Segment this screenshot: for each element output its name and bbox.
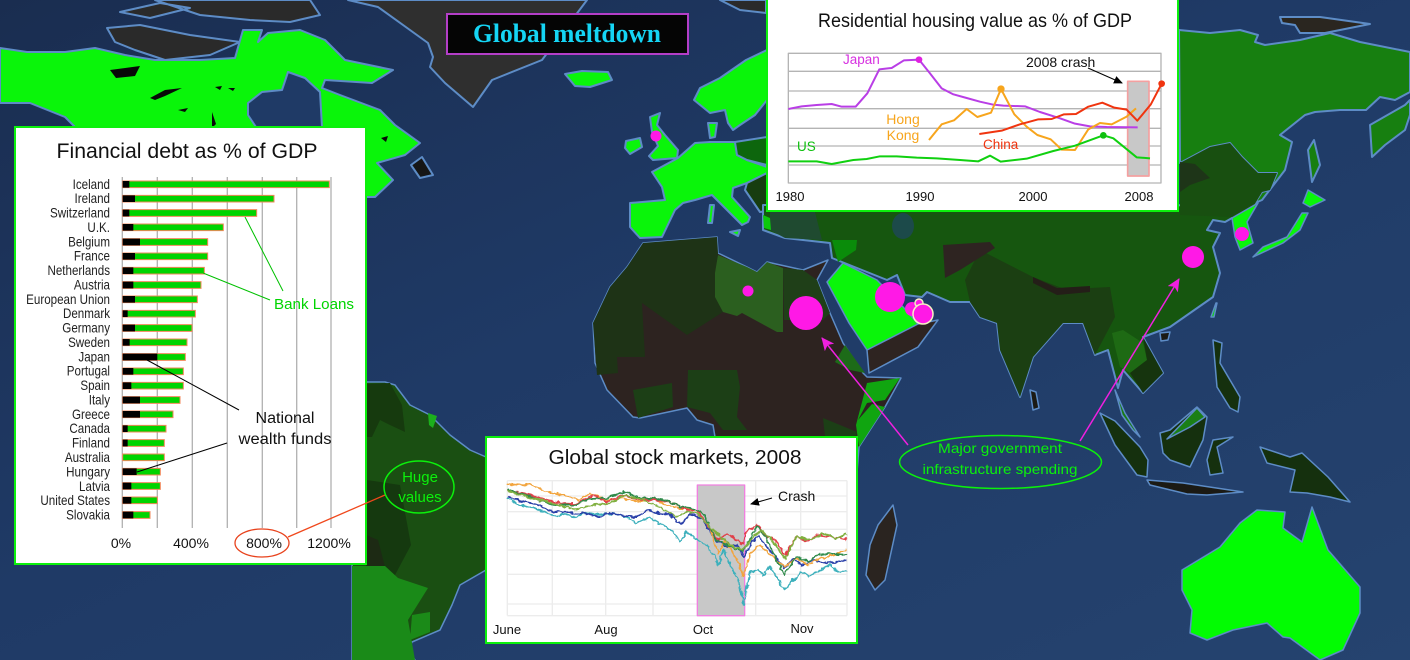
line: blue index bbox=[507, 497, 847, 568]
land: Newfoundland bbox=[411, 157, 433, 178]
grid lines bbox=[122, 177, 331, 528]
land: Canada and Alaska bbox=[0, 30, 420, 197]
bubble: China bbox=[1182, 246, 1204, 268]
callout: major government infrastructure spending: Major government bbox=[938, 440, 1062, 456]
country labels bbox=[26, 177, 111, 523]
lakes bbox=[110, 66, 388, 142]
land: Sumatra bbox=[1100, 413, 1148, 477]
region: Colombia and Venezuela bbox=[367, 383, 405, 437]
x axis labels bbox=[776, 189, 1153, 204]
index lines bbox=[507, 484, 847, 605]
country labels: Austria bbox=[74, 278, 110, 293]
land: Malay peninsula bbox=[1115, 390, 1140, 437]
line: Japan bbox=[788, 60, 1138, 127]
line: olive index bbox=[507, 491, 847, 558]
country labels: Japan bbox=[78, 350, 110, 365]
heading: financial debt: Financial debt as % of GDP bbox=[56, 140, 318, 163]
land: Denmark and Mediterranean islands bbox=[708, 123, 740, 236]
heading: global stock markets: Global stock markets, 2008 bbox=[548, 447, 802, 469]
land: Australia bbox=[1182, 507, 1360, 660]
land: Saudi Arabia bbox=[827, 263, 918, 350]
land: Sulawesi bbox=[1207, 437, 1233, 475]
country labels: Italy bbox=[89, 393, 111, 408]
region: Himalaya bbox=[1033, 277, 1090, 295]
region: Guyana bbox=[428, 413, 437, 428]
country labels: France bbox=[74, 249, 110, 264]
country labels: Hungary bbox=[66, 465, 111, 480]
bubble: UK bbox=[650, 130, 662, 142]
arrow: to China bbox=[1080, 279, 1179, 441]
land: Java bbox=[1147, 480, 1243, 495]
peak markers bbox=[916, 56, 1165, 139]
heading: residential housing: Residential housing value as % of GDP bbox=[818, 10, 1132, 32]
region: Somalia bbox=[856, 378, 900, 447]
country labels: Canada bbox=[69, 421, 110, 436]
line: red index bbox=[507, 490, 847, 555]
bars bbox=[123, 181, 329, 518]
country labels: Slovakia bbox=[66, 508, 110, 523]
green bank loan bars bbox=[123, 181, 329, 518]
callout: huge values: values bbox=[398, 489, 442, 506]
x axis labels: Aug bbox=[594, 622, 618, 637]
callout: major government infrastructure spending bbox=[822, 279, 1179, 488]
land: western Europe bbox=[630, 142, 767, 238]
land: Ireland bbox=[625, 138, 642, 154]
title box bbox=[447, 14, 688, 54]
land: Sarawak bbox=[1167, 408, 1205, 439]
region: Afghanistan bbox=[943, 242, 995, 278]
land: South America bbox=[352, 382, 486, 660]
land: Arctic islands bbox=[107, 0, 766, 60]
region: Ivory Coast bbox=[633, 383, 673, 418]
bubble: Qatar bbox=[905, 302, 919, 316]
country labels: Belgium bbox=[68, 235, 110, 250]
x axis labels: 400% bbox=[173, 535, 209, 551]
bubble: Bahrain bbox=[915, 299, 923, 307]
annotation: 2008 crash bbox=[1026, 54, 1122, 83]
land: Hainan and Sri Lanka bbox=[1030, 332, 1170, 410]
bubble: Saudi Arabia bbox=[875, 282, 905, 312]
x axis labels: Nov bbox=[790, 621, 814, 636]
country labels: Iceland bbox=[73, 177, 110, 192]
line: Hong Kong bbox=[929, 89, 1136, 150]
line label: Japan: Japan bbox=[843, 52, 880, 67]
land: Taiwan bbox=[1211, 303, 1217, 317]
country labels: Finland bbox=[72, 436, 110, 451]
region: Peru bbox=[366, 480, 411, 575]
country labels: Sweden bbox=[68, 335, 110, 350]
country labels: Latvia bbox=[79, 479, 110, 494]
callout: huge values bbox=[235, 461, 454, 557]
annotation: 2008 crash: 2008 crash bbox=[1026, 54, 1095, 70]
region: Nigeria and Chad bbox=[687, 370, 747, 430]
Hudson Bay bbox=[248, 72, 322, 127]
line label: Hong Kong: Hong bbox=[886, 111, 920, 127]
panel: residential housing chart bbox=[767, 0, 1178, 211]
region: Greece bbox=[763, 215, 771, 230]
region: India bbox=[965, 250, 1115, 397]
country labels: Spain bbox=[80, 378, 110, 393]
line: teal index bbox=[507, 498, 847, 605]
land: Greenland bbox=[348, 0, 587, 107]
x axis labels bbox=[111, 535, 351, 551]
land: Japan bbox=[1253, 190, 1325, 257]
x axis labels: 1980 bbox=[776, 189, 804, 204]
country labels: Ireland bbox=[75, 191, 110, 206]
region: Uruguay bbox=[410, 612, 430, 640]
callout: bank loans bbox=[203, 217, 354, 313]
land: Africa bbox=[593, 237, 901, 560]
land: eastern Europe bbox=[735, 137, 767, 165]
country labels: Germany bbox=[62, 321, 111, 336]
chart frame and grid bbox=[788, 53, 1161, 183]
callout: national wealth funds: wealth funds bbox=[237, 431, 332, 448]
land: Arctic Siberia islands bbox=[1280, 17, 1370, 33]
country labels: Australia bbox=[65, 450, 110, 465]
region: Manchuria bbox=[1180, 143, 1277, 217]
region: Iraq bbox=[832, 240, 857, 262]
x axis labels: Oct bbox=[693, 622, 713, 637]
callout: national wealth funds bbox=[137, 360, 332, 472]
land: Asia bbox=[763, 205, 1240, 397]
line: China bbox=[979, 84, 1162, 134]
bubble: Egypt bbox=[789, 296, 823, 330]
bubble: UAE bbox=[913, 304, 933, 324]
crash band bbox=[1128, 81, 1149, 176]
annotation: crash bbox=[751, 488, 815, 504]
spending bubbles bbox=[650, 130, 1249, 330]
country labels: Portugal bbox=[67, 364, 110, 379]
callout: national wealth funds: National bbox=[256, 410, 314, 427]
line label: China: China bbox=[983, 137, 1019, 152]
x axis labels: June bbox=[493, 622, 521, 637]
land: New Guinea bbox=[1260, 447, 1350, 502]
callout: bank loans: Bank Loans bbox=[274, 296, 354, 313]
line label: US: US bbox=[797, 139, 816, 154]
country labels: U.K. bbox=[87, 220, 110, 235]
land: Korea bbox=[1232, 203, 1258, 250]
region: Turkey bbox=[770, 212, 822, 240]
country labels: Greece bbox=[72, 407, 110, 422]
bubble: Libya bbox=[742, 286, 754, 296]
x axis labels bbox=[493, 621, 814, 637]
land: Sakhalin bbox=[1308, 140, 1320, 182]
x axis labels: 1990 bbox=[906, 189, 934, 204]
land: Russian Far East bbox=[1179, 30, 1410, 203]
region: Argentina and Chile bbox=[352, 566, 428, 660]
land: Kamchatka bbox=[1370, 100, 1410, 157]
x axis labels: 2000 bbox=[1019, 189, 1047, 204]
region: Bolivia bbox=[366, 535, 385, 567]
callout: huge values: Huge bbox=[402, 469, 438, 486]
region: Libya bbox=[715, 255, 783, 332]
region: Caspian Sea bbox=[892, 213, 914, 239]
line: dark green index bbox=[507, 489, 847, 575]
crash band bbox=[697, 485, 745, 616]
panel: financial debt bar chart bbox=[15, 127, 366, 564]
country labels: Switzerland bbox=[50, 206, 110, 221]
line: orange index bbox=[507, 484, 847, 577]
land: Iceland bbox=[565, 71, 612, 87]
callout: major government infrastructure spending: infrastructure spending bbox=[922, 461, 1078, 477]
land: Scandinavia bbox=[694, 50, 767, 130]
land: Yemen and Oman bbox=[867, 320, 938, 373]
land: Britain bbox=[649, 113, 678, 160]
x axis labels: 1200% bbox=[307, 535, 351, 551]
arrow: to Egypt bbox=[822, 338, 908, 445]
line label: Hong Kong: Kong bbox=[887, 127, 919, 143]
grid bbox=[507, 481, 847, 616]
black wealth fund bars bbox=[123, 181, 157, 518]
region: Kenya bbox=[823, 418, 857, 437]
country labels: Netherlands bbox=[47, 263, 110, 278]
region: northwest Africa bbox=[593, 237, 723, 375]
panel: global stock markets chart bbox=[486, 437, 857, 643]
region: Thailand bbox=[1112, 330, 1147, 373]
x axis labels: 2008 bbox=[1125, 189, 1153, 204]
region: Mongolia edge bbox=[1180, 162, 1210, 192]
region: Indochina bbox=[1130, 337, 1163, 393]
region: Egypt bbox=[783, 268, 830, 320]
x axis labels: 800% bbox=[246, 535, 282, 551]
country labels: European Union bbox=[26, 292, 110, 307]
land: Philippines bbox=[1213, 340, 1240, 412]
land: Madagascar bbox=[866, 505, 897, 590]
country labels: United States bbox=[40, 493, 110, 508]
title box: Global meltdown bbox=[473, 19, 662, 48]
annotation: crash: Crash bbox=[778, 488, 815, 504]
country labels: Denmark bbox=[63, 306, 111, 321]
x axis labels: 0% bbox=[111, 535, 131, 551]
line: US bbox=[788, 135, 1150, 164]
land: Borneo bbox=[1160, 407, 1207, 467]
region: Eritrea bbox=[835, 345, 865, 373]
bubble: South Korea bbox=[1235, 227, 1249, 241]
